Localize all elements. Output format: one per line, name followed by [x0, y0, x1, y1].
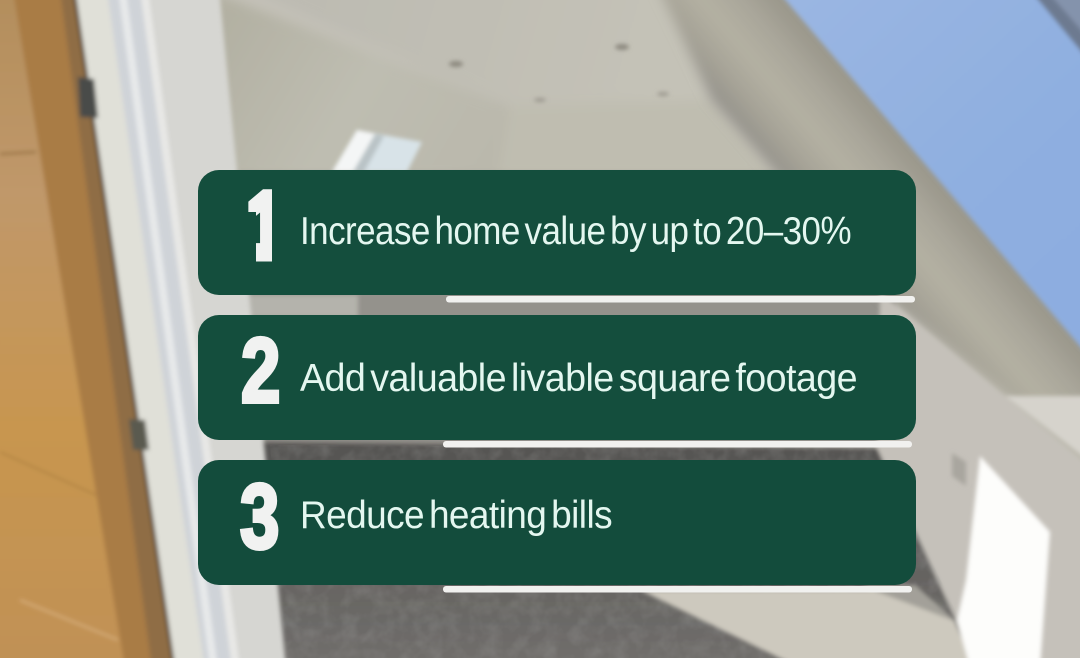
label 1: Increase home value by up to 20–30% [300, 210, 851, 253]
underline bar 3 [443, 586, 912, 592]
card 1 [198, 170, 916, 295]
label 2: Add valuable livable square footage [300, 357, 857, 400]
label 3: Reduce heating bills [300, 494, 612, 537]
card 3 [198, 460, 916, 585]
number 2: 2 [241, 320, 280, 422]
card 2 [198, 315, 916, 440]
number 1: 1 [247, 175, 286, 277]
underline bar 2 [443, 441, 912, 448]
underline bar 1 [446, 296, 915, 302]
number 3: 3 [240, 466, 279, 568]
